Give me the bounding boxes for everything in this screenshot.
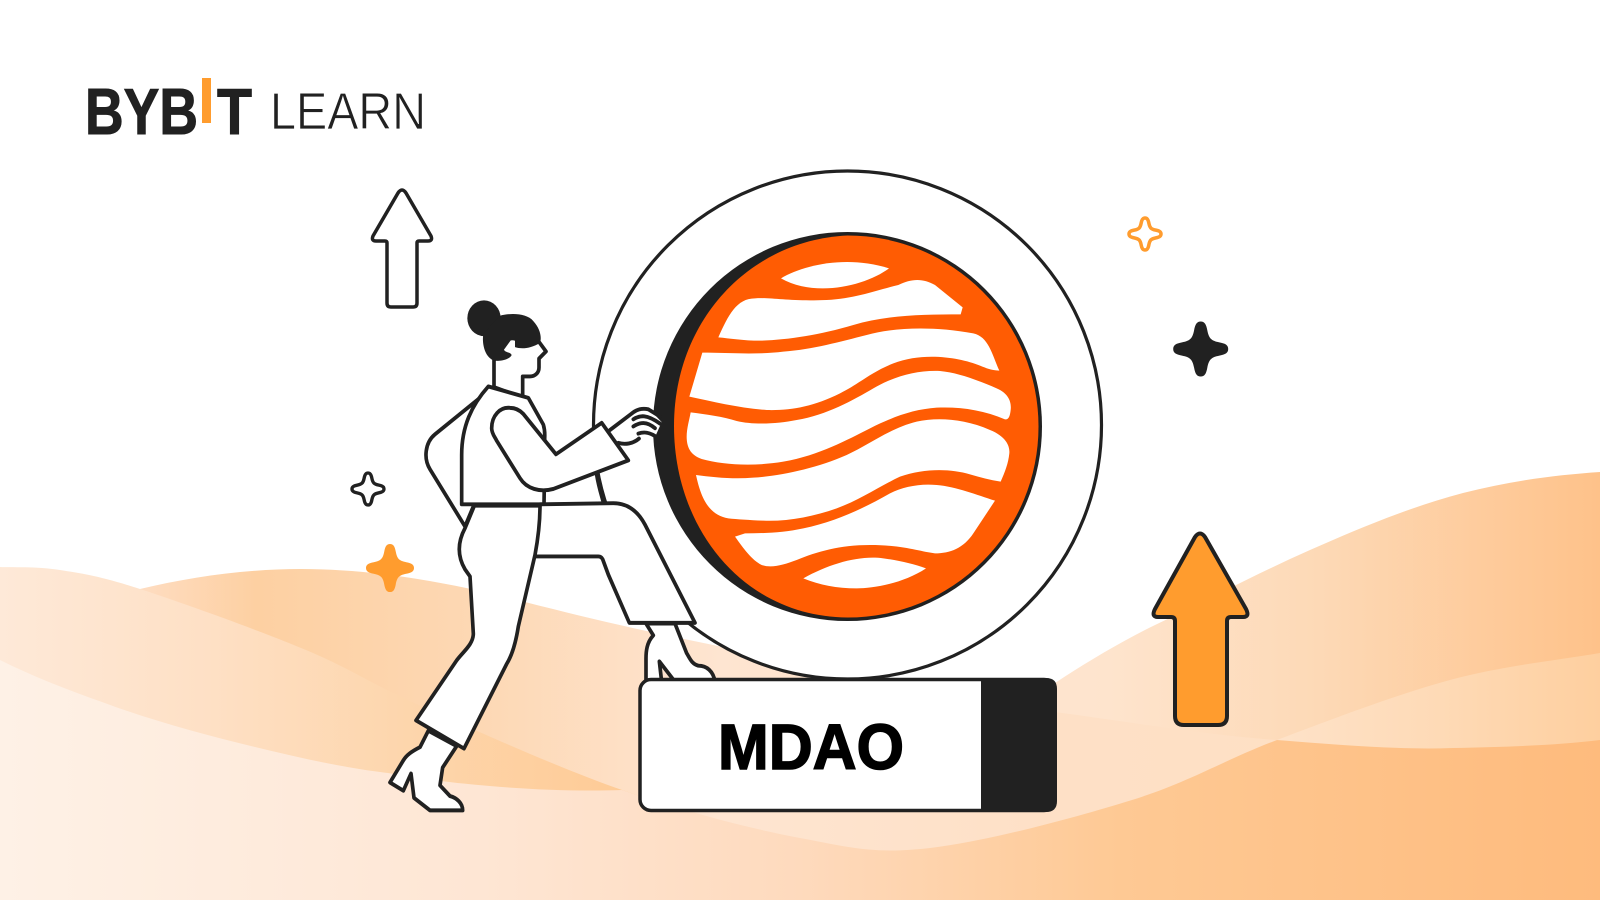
logo: BYBIT LEARN: BYB	[85, 75, 198, 148]
logo: BYBIT LEARN: LEARN	[270, 83, 426, 141]
icon: black star	[1173, 322, 1228, 376]
icon: outline arrow up	[372, 190, 432, 307]
icon: outlined black star	[352, 473, 384, 505]
icon: orange arrow up	[1154, 534, 1247, 725]
icon: orange outline star	[1129, 218, 1161, 250]
large outer circle	[594, 171, 1102, 679]
coin: MDAO logo	[653, 232, 1042, 621]
woman figure	[390, 300, 715, 810]
coin white bands	[687, 262, 1011, 588]
logo: BYBIT LEARN: T	[217, 75, 252, 148]
icon: orange filled star	[366, 544, 414, 592]
background waves	[0, 472, 1600, 900]
label box	[640, 678, 1057, 812]
logo: BYBIT LEARN	[85, 75, 426, 148]
label text: MDAO	[718, 711, 904, 783]
